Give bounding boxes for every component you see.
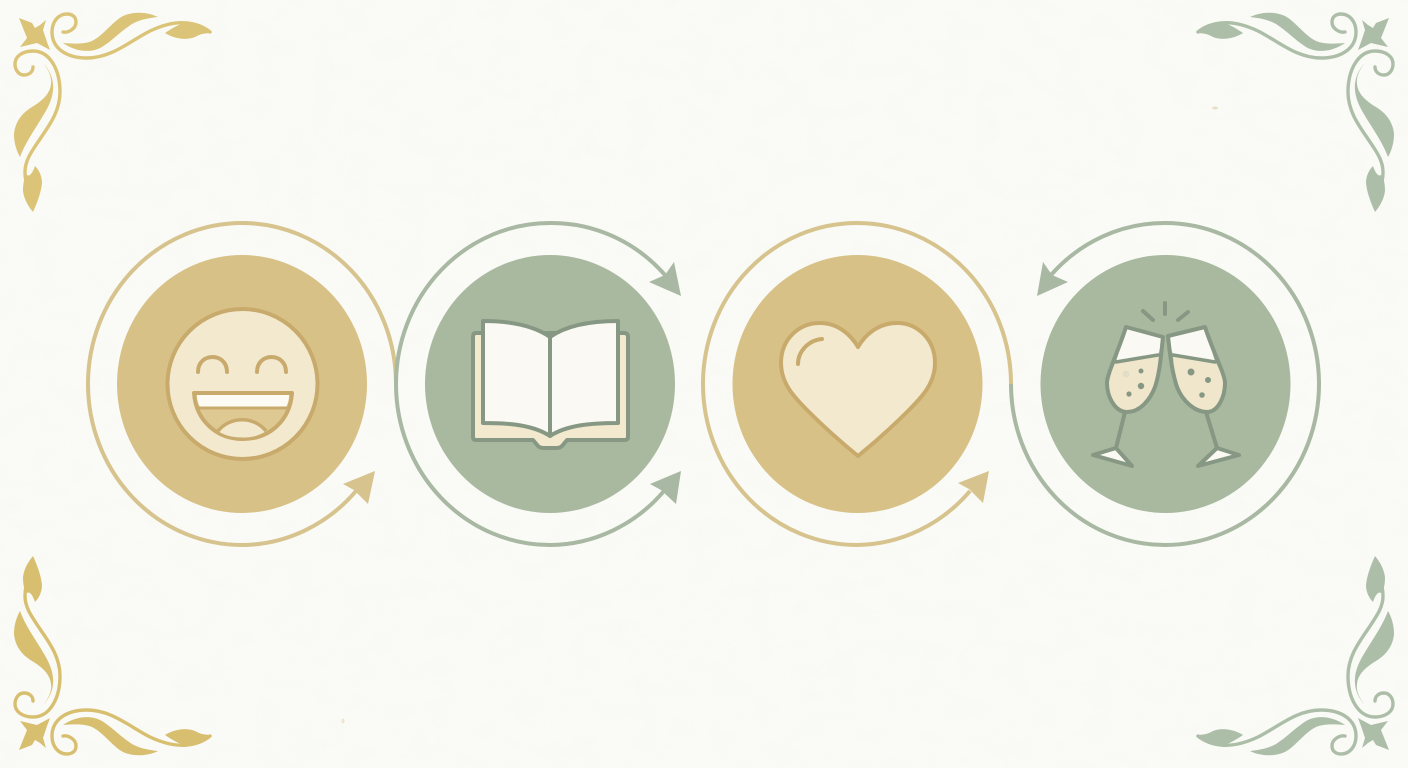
corner ornament: bottom right green bbox=[1196, 556, 1394, 755]
green disc 4 bbox=[1040, 255, 1290, 513]
corner ornament: top right green bbox=[1196, 13, 1394, 212]
green ring arrow 4 bbox=[1011, 223, 1319, 545]
green ring arrows 2 bbox=[396, 223, 681, 545]
corner ornament: top left gold bbox=[14, 13, 212, 212]
cycle step 2: reading bbox=[396, 223, 681, 545]
cycle step 1: joy bbox=[88, 223, 396, 545]
right glass bbox=[1168, 327, 1239, 466]
cycle step 3: love bbox=[703, 223, 1011, 545]
icon: clinking champagne glasses bbox=[1093, 303, 1239, 466]
clink sparkle bbox=[1143, 303, 1188, 320]
gold disc 1 bbox=[117, 255, 367, 513]
left glass bbox=[1093, 327, 1163, 466]
cycle step 4: celebration bbox=[1011, 223, 1319, 545]
green disc 2 bbox=[425, 255, 675, 513]
icon: heart bbox=[781, 323, 935, 456]
corner ornament: bottom left gold bbox=[14, 556, 212, 755]
gold disc 3 bbox=[732, 255, 982, 513]
gold ring arrow 1 bbox=[88, 223, 396, 545]
icon: laughing face bbox=[168, 309, 318, 459]
gold ring arrow 3 bbox=[703, 223, 1011, 545]
icon: open book bbox=[473, 321, 628, 448]
